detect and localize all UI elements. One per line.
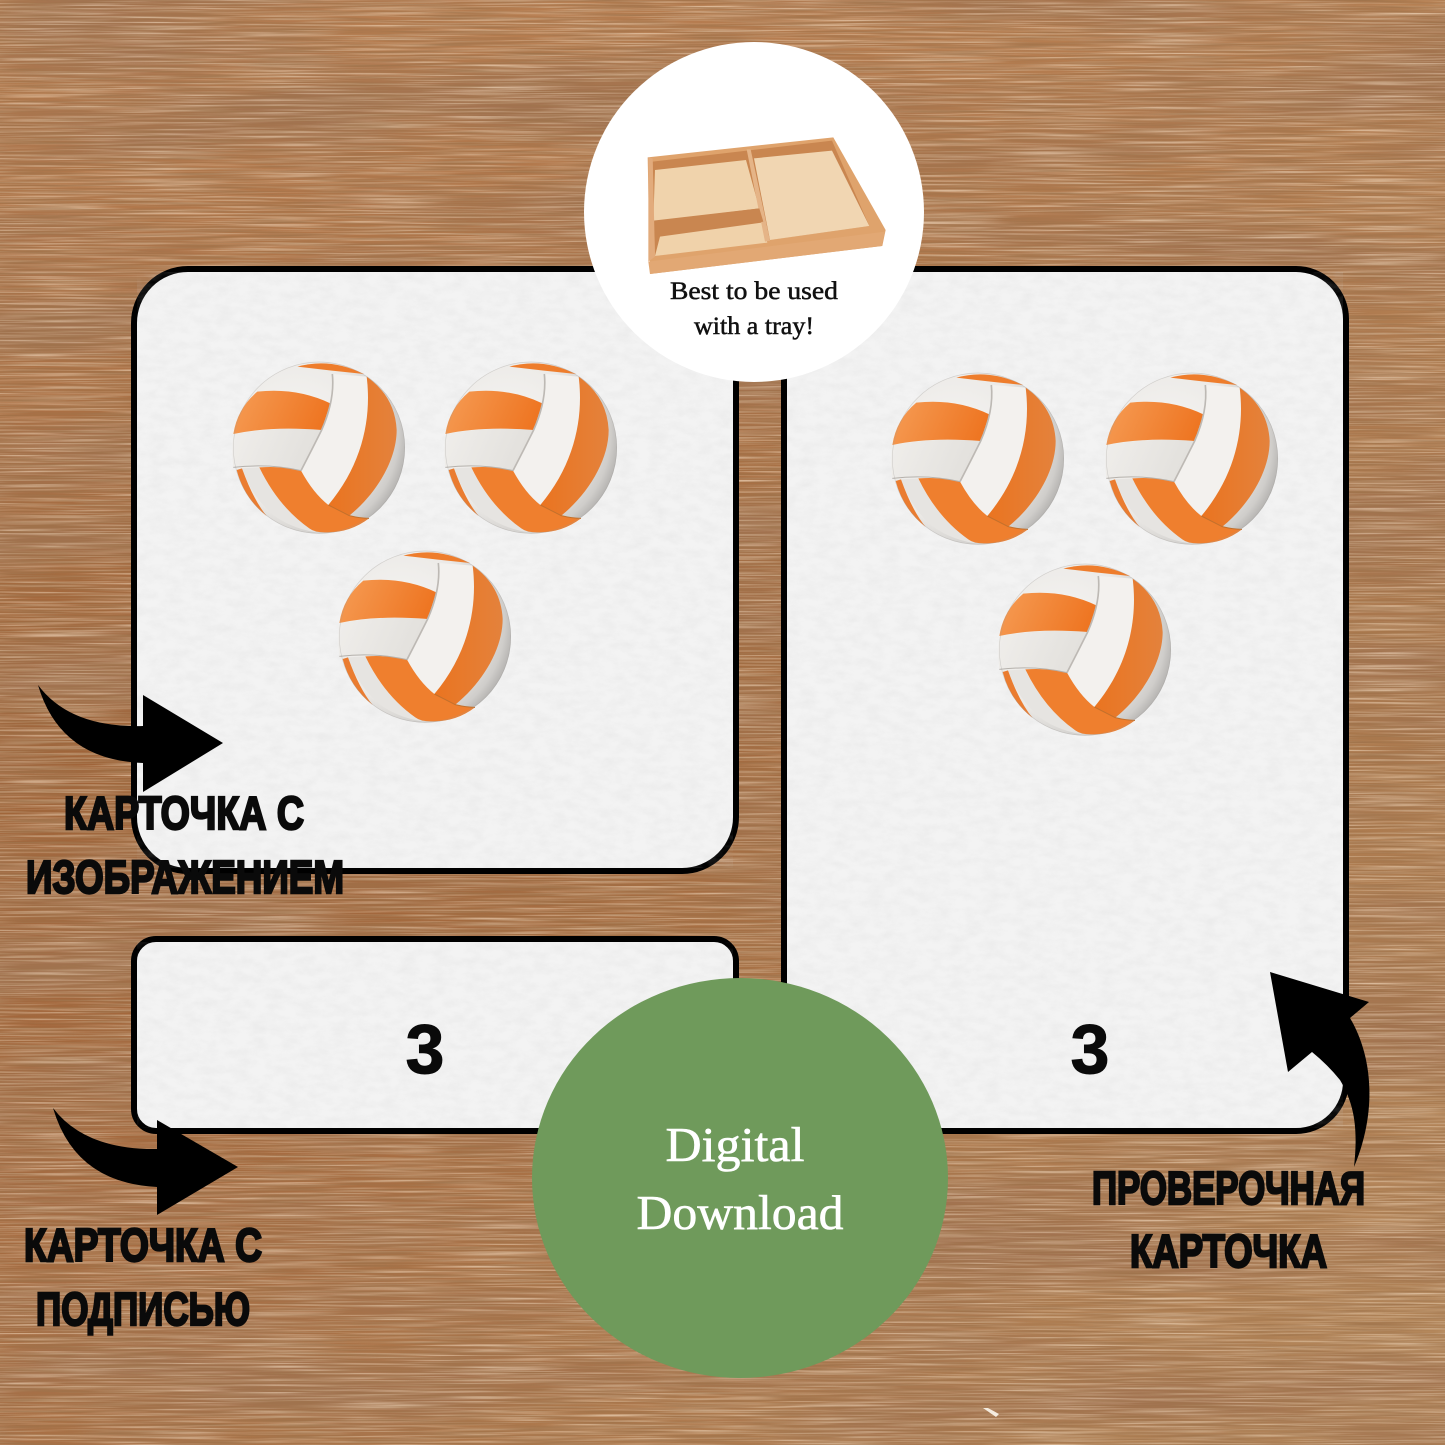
panel: picture card — [134, 269, 736, 871]
label: caption card: КАРТОЧКА С — [24, 1219, 262, 1271]
number on label card: 3 — [406, 1010, 444, 1088]
badge: digital download: Digital — [666, 1117, 804, 1172]
tray caption: Best to be used — [670, 278, 839, 305]
panel: label card — [134, 939, 736, 1131]
tray callout — [584, 42, 924, 382]
badge: digital download: Download — [636, 1185, 844, 1240]
arrow: to control card — [1270, 972, 1369, 1167]
volleyballs on picture card — [232, 362, 617, 723]
tray caption: with a tray! — [694, 313, 814, 340]
label: control card — [1092, 1162, 1365, 1277]
label: picture card: ИЗОБРАЖЕНИЕМ — [26, 851, 344, 903]
number on control card: 3 — [1071, 1010, 1109, 1088]
label: control card: ПРОВЕРОЧНАЯ — [1092, 1162, 1365, 1214]
icon: wooden tray — [648, 137, 886, 274]
label: control card: КАРТОЧКА — [1130, 1225, 1327, 1277]
label: picture card — [26, 787, 344, 903]
label: caption card: ПОДПИСЬЮ — [36, 1283, 250, 1335]
label: picture card: КАРТОЧКА С — [64, 787, 304, 839]
label: caption card — [24, 1219, 262, 1335]
badge: digital download — [532, 978, 948, 1378]
volleyballs on control card — [891, 373, 1278, 736]
tray caption — [670, 278, 839, 340]
arrow: to label card — [53, 1108, 238, 1215]
arrow: to picture card — [38, 685, 223, 792]
panel: control card — [784, 269, 1346, 1131]
